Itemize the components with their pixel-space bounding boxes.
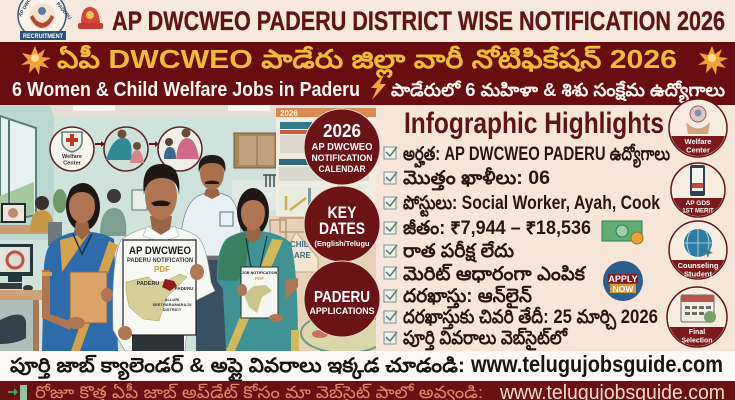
Telugu headline: ఏపీ DWCWEO పాడేరు జిల్లా వారీ నోటిఫికేషన్ 2026	[57, 44, 677, 79]
round icon: counseling student	[668, 221, 728, 280]
footer band	[0, 381, 735, 400]
item: qualification: అర్హత: AP DWCWEO PADERU ఉద్యోగాలు	[403, 143, 670, 168]
badge: 2026 notification calendar: NOTIFICATION	[312, 153, 373, 164]
badge: key dates: KEY	[328, 203, 357, 222]
item: salary: జీతం: ₹7,944 – ₹18,536	[403, 218, 591, 239]
notification board: PDF	[154, 265, 170, 274]
heading: infographic highlights: Infographic Highlights	[404, 107, 664, 140]
back wall poster and lower scene	[269, 216, 376, 351]
round icon: AP GDS 1st merit	[670, 163, 726, 218]
round icon: counseling student: Student	[684, 270, 712, 278]
notification board	[123, 240, 196, 335]
icon: caregiver with girl	[104, 127, 148, 171]
round icon: final selection: Final	[689, 329, 705, 336]
round icon: welfare center: Center	[686, 146, 710, 154]
item: posts	[384, 193, 660, 217]
woman right in teal saree	[217, 188, 299, 351]
three linked circles: welfare center process	[50, 127, 202, 171]
icon: arrow and phone	[8, 385, 27, 400]
back wall poster and lower scene: CHIL	[290, 240, 309, 249]
back wall poster and lower scene: ARE	[294, 251, 312, 260]
front desk with monitor	[0, 244, 42, 351]
notification board: PADERU NOTIFICATION	[127, 257, 193, 264]
icon: right spark	[698, 46, 728, 75]
Telugu subheading: పాడేరులో 6 మహిళా & శిశు సంక్షేమ ఉద్యోగాలు	[391, 80, 725, 104]
icon: left spark	[21, 46, 51, 75]
header band	[0, 0, 735, 42]
call to action band	[0, 351, 735, 382]
icon: siren	[78, 7, 103, 29]
round icon: AP GDS 1st merit: 1ST MERIT	[682, 208, 714, 214]
item: merit selection: మెరిట్ ఆధారంగా ఎంపిక	[403, 263, 587, 285]
logo: recruitment badge: PADERU	[54, 1, 73, 21]
badge: 2026 notification calendar: 2026	[323, 121, 361, 141]
icon: caregiver with boy	[158, 127, 202, 171]
item: posts: పోస్టులు: Social Worker, Ayah, Cook	[403, 193, 660, 217]
job notification paper: PDF	[255, 276, 264, 281]
badge: 2026 notification calendar: AP DWCWEO	[312, 141, 372, 153]
woman left in blue saree	[42, 183, 118, 351]
round icon: final selection: Selection	[681, 338, 713, 344]
item: online application: దరఖాస్తు: ఆన్‌లైన్	[403, 285, 533, 309]
item: full details on website: పూర్తి వివరాలు వెబ్‌సైట్‌లో	[403, 327, 569, 351]
calendar 2026 wall chart: 2026	[280, 109, 298, 118]
logo: recruitment badge	[18, 0, 73, 40]
badge: key dates: DATES	[319, 219, 365, 238]
notification board: PADERU	[175, 286, 193, 291]
icon: banknote and coin	[602, 221, 643, 244]
icon: welfare center circle: Welfare	[62, 154, 82, 160]
logo: recruitment badge: RECRUITMENT	[23, 33, 63, 40]
back desk and workers	[0, 189, 147, 246]
central man holding notice	[113, 164, 215, 351]
round icon: welfare center: Welfare	[685, 137, 711, 146]
icon: welfare center circle: Center	[63, 160, 82, 166]
cabinet	[234, 133, 276, 168]
icon: apply now globe: NOW	[613, 284, 634, 294]
English subheading: 6 Women & Child Welfare Jobs in Paderu	[12, 79, 360, 101]
icon: apply now globe	[603, 261, 643, 301]
badge: paderu applications: PADERU	[314, 289, 370, 306]
window	[0, 116, 36, 222]
notification board: ALLURI	[165, 297, 179, 302]
Telugu call to action: పూర్తి జాబ్ క్యాలెండర్ & అప్లై వివరాలు ఇక్కడ చూడండి:	[10, 354, 465, 382]
folder	[70, 272, 107, 323]
arrow	[95, 141, 105, 147]
item: no written exam: రాత పరీక్ష లేదు	[403, 240, 514, 263]
badge: paderu applications: APPLICATIONS	[310, 306, 374, 317]
icon: welfare center circle	[50, 127, 94, 171]
notification board: DISTRICT	[163, 307, 182, 312]
arrow	[149, 141, 159, 147]
highlights checklist	[384, 143, 670, 351]
calendar 2026 wall chart	[276, 108, 376, 216]
round icon: AP GDS 1st merit: AP GDS	[686, 200, 711, 207]
icon: apply now globe: APPLY	[608, 274, 638, 284]
job notification paper	[241, 267, 278, 318]
man standing at back	[180, 155, 242, 351]
item: last date: దరఖాస్తుకు చివరి తేదీ: 25 మార్చి 2026	[403, 306, 658, 330]
item: qualification	[384, 143, 670, 168]
kitchen wall tiles and utensils	[232, 175, 277, 210]
badge: 2026 notification calendar	[304, 109, 380, 185]
notification board: PADERU	[137, 281, 159, 287]
round icon: welfare center	[668, 99, 728, 158]
round icon: final selection	[667, 287, 727, 348]
badge: key dates	[304, 186, 380, 262]
round icon: counseling student: Counseling	[678, 261, 719, 270]
badge: key dates: (English/Telugu	[314, 239, 370, 248]
notification board: AP DWCWEO	[129, 245, 191, 257]
badge: paderu applications	[304, 261, 380, 337]
job notification paper: JOB NOTIFICATION	[242, 271, 278, 275]
notification board: SEETHARAMARAJU	[152, 302, 192, 307]
illustration: office scene	[0, 105, 389, 353]
maroon banner	[0, 42, 735, 105]
highlights panel background	[376, 105, 735, 351]
icon: lightning	[371, 74, 386, 100]
item: vacancies: మొత్తం ఖాళీలు: 06	[403, 167, 550, 191]
badge: 2026 notification calendar: CALENDAR	[318, 164, 366, 175]
